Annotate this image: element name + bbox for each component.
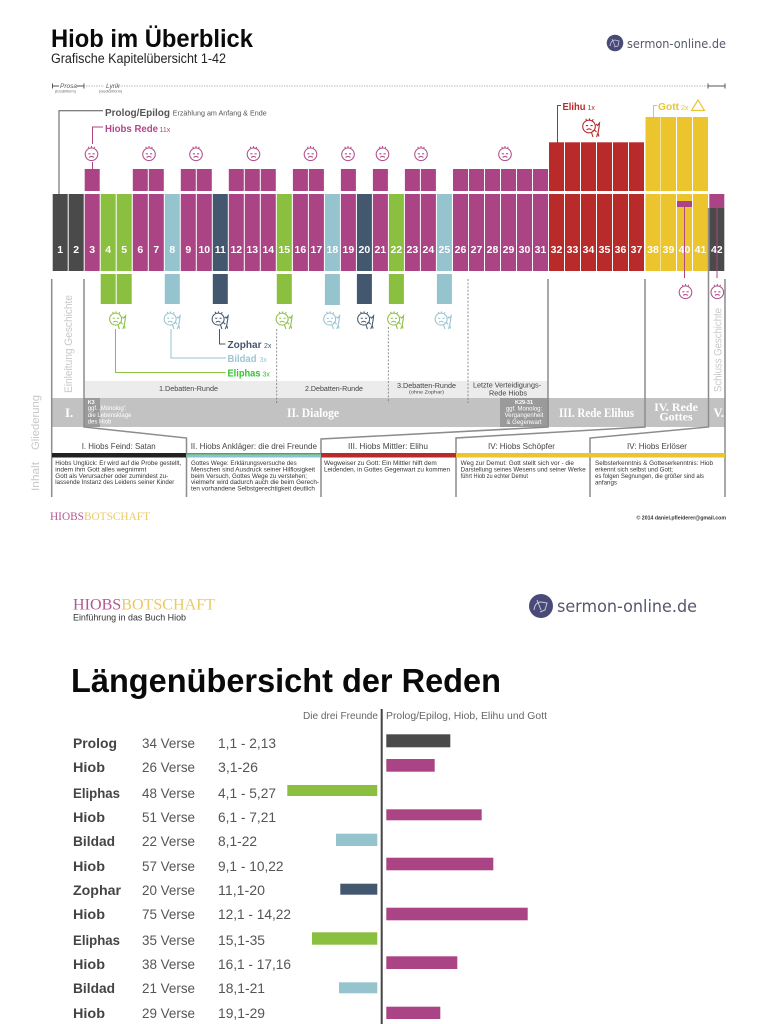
debate rounds band: 3.Debatten-Runde [397,383,456,390]
summary column I: Hiobs Unglück: Er wird auf die Probe gestellt, [55,461,182,467]
row: Hiob 3: Hiob [73,759,105,775]
chapter numbers: 28 [487,244,498,256]
row: Bildad 18: 18,1-21 [218,980,265,996]
prosa / lyrik timeline: (Gedichtform) [99,90,123,94]
label: Prolog/Epilog [59,107,267,194]
debate rounds band: Rede Hiobs [489,390,528,398]
outline band: sections I-V: III. Rede Elihus [559,406,634,420]
debate rounds band: 1.Debatten-Runde [159,386,218,393]
row: Eliphas 4-5 [73,785,377,801]
chapter numbers: 3 [89,244,95,256]
row: Hiob 19: 29 Verse [142,1005,195,1021]
chapter numbers: 18 [327,244,338,256]
row: Hiob 3 [73,759,435,775]
summary column IV: Weg zur Demut: Gott stellt sich vor - die [461,461,575,467]
row: Hiob 6-7 [73,809,482,825]
label: Elihu: 1x [588,105,595,112]
row: Bildad 18 [73,980,377,996]
brand second page: HIOBSBOTSCHAFT [73,596,215,614]
chapter numbers: 8 [169,244,175,256]
brand second page: Einführung in das Buch Hiob [73,612,186,624]
row: Prolog: 34 Verse [142,735,195,751]
summary column V [590,441,725,486]
summary column I: indem ihm Gott alles wegnimmt [55,468,147,474]
labels: friends: 3x [260,357,267,364]
summary column I: lassende Instanz des Leidens seiner Kinder [55,480,174,486]
outline band: sections I-V: Vergangenheit [505,413,544,419]
chapter numbers: 7 [153,244,159,256]
logo: sermon-online top [607,35,726,51]
icon: Elihu face [583,118,600,137]
chapter numbers: 21 [375,244,386,256]
summary column II: ten vorhandene Selbstgerechtigkeit deutlich [191,486,315,492]
row: Eliphas 4-5: 4,1 - 5,27 [218,785,276,801]
labels: friends: Zophar [228,339,262,351]
summary column II: vielmehr wird dadurch auch die beim Gerech- [191,480,319,486]
row: Eliphas 15: Eliphas [73,932,120,948]
outline band: sections I-V [52,398,725,427]
row: Hiob 12-14 [73,906,528,922]
chapter numbers: 9 [185,244,191,256]
chapter numbers: 12 [230,244,242,256]
prosa / lyrik timeline [52,83,725,94]
row: Hiob 9-10 [73,858,493,874]
vertical labels: Inhalt [30,462,42,491]
summary column I: Gott als Verursacher oder zumindest zu- [55,474,168,480]
chart legend: Die drei Freunde [303,711,378,722]
chapter numbers: 35 [599,244,610,256]
chapter numbers: 27 [471,244,482,256]
summary column I: I. Hiobs Feind: Satan [82,441,156,451]
row: Eliphas 4-5: Eliphas [73,785,120,801]
row: Bildad 8 [73,833,377,849]
row: Hiob 19: 19,1-29 [218,1005,265,1021]
labels: friends: Eliphas [228,368,261,380]
row: Zophar 11: Zophar [73,882,122,898]
row: Hiob 19: Hiob [73,1005,105,1021]
chapter numbers: 6 [137,244,143,256]
chapter numbers: 11 [215,244,226,256]
chart axis [381,709,383,1024]
summary column IV: Darstellung seines Wesens und seiner Werke [461,468,586,474]
brand second page [73,596,215,624]
row: Eliphas 4-5: 48 Verse [142,785,195,801]
summary column II: II. Hiobs Ankläger: die drei Freunde [191,441,317,451]
chapter numbers: 15 [278,244,290,256]
prosa / lyrik timeline: (Erzählform) [55,90,77,94]
label: Elihu: Elihu [562,101,586,113]
summary column II: Menschen sind Ausdruck seiner Hilflosigkeit [191,468,315,474]
logo: sermon-online top: sermon-online.de [627,36,726,51]
icons: friends [110,311,451,329]
copyright: © 2014 daniel.pfleiderer@gmail.com [636,514,726,522]
label: Hiobs Rede [92,123,171,169]
row: Hiob 6-7: 51 Verse [142,809,195,825]
chapter numbers: 2 [73,244,79,256]
outline band: sections I-V: & Gegenwart [506,420,542,426]
label: Prolog/Epilog: Prolog/Epilog [105,107,170,119]
row: Zophar 11: 11,1-20 [218,882,265,898]
debate rounds band: 2.Debatten-Runde [305,386,363,393]
summary column V: Selbsterkenntnis & Gotteserkenntnis: Hiob [595,461,714,467]
chapter numbers: 17 [311,244,322,256]
outline band: sections I-V: V. [714,406,724,420]
row: Prolog: 1,1 - 2,13 [218,735,276,751]
label: Prolog/Epilog: Erzählung am Anfang & Ende [173,110,267,118]
vertical labels: Einleitung Geschichte [63,295,75,393]
chapter numbers: 38 [647,244,659,256]
summary column V: anfangs [595,480,617,486]
summary column IV: IV: Hiobs Schöpfer [488,441,555,451]
chapter numbers: 14 [262,244,274,256]
row: Hiob 16-17: Hiob [73,956,105,972]
row: Hiob 16-17: 16,1 - 17,16 [218,956,291,972]
labels: friends: 3x [262,372,270,378]
chapter columns 1-42 [53,194,724,271]
row: Bildad 8: 22 Verse [142,833,195,849]
chapter numbers: 4 [105,244,111,256]
row: Prolog [73,734,450,751]
row: Hiob 6-7: Hiob [73,809,105,825]
outline band: sections I-V: K29-31 [515,400,533,406]
chart legend: Prolog/Epilog, Hiob, Elihu und Gott [386,711,547,722]
row: Bildad 18: Bildad [73,980,115,996]
chapter numbers: 19 [343,244,354,256]
label: Gott [654,100,704,117]
chapter numbers: 24 [423,244,434,256]
chapter numbers: 25 [439,244,450,256]
outline band: sections I-V: Gottes [659,410,693,424]
debate rounds band: (ohne Zophar) [409,390,445,394]
row: Hiob 3: 26 Verse [142,759,195,775]
chapter numbers: 31 [535,244,546,256]
summary column V: IV: Hiobs Erlöser [627,441,687,451]
structure lines [52,204,725,497]
row: Hiob 3: 3,1-26 [218,759,258,775]
chapter numbers: 1 [57,244,63,256]
chapter numbers: 23 [407,244,418,256]
row: Hiob 6-7: 6,1 - 7,21 [218,809,276,825]
label: Gott: 2x [681,105,689,112]
chapter numbers: 33 [567,244,578,256]
chapter numbers: 42 [711,244,723,256]
upper blocks: Hiob speeches [85,169,548,191]
chapter numbers [57,244,723,256]
row: Hiob 9-10: 9,1 - 10,22 [218,858,284,874]
labels: friends: Bildad [228,353,256,365]
faces: Hiob row [85,146,511,161]
outline band: sections I-V: I. [65,405,73,420]
chapter numbers: 34 [583,244,594,256]
subtitle: Grafische Kapitelübersicht 1-42 [51,51,226,66]
summary column IV [456,441,590,480]
chapter numbers: 29 [503,244,514,256]
summary column III: III. Hiobs Mittler: Elihu [348,441,428,451]
chapter numbers: 41 [695,244,706,256]
chapter numbers: 30 [519,244,530,256]
row: Zophar 11: 20 Verse [142,882,195,898]
outline band: sections I-V: K3 [88,400,95,406]
row: Hiob 9-10: Hiob [73,858,105,874]
summary column III: Leidenden, in Gottes Gegenwart zu kommen [324,468,450,474]
row: Hiob 16-17: 38 Verse [142,956,195,972]
chapter numbers: 26 [455,244,466,256]
chapter numbers: 36 [615,244,626,256]
row: Hiob 12-14: Hiob [73,906,105,922]
chapter numbers: 10 [198,244,210,256]
vertical labels: Gliederung [30,395,42,450]
row: Hiob 16-17 [73,956,457,972]
upper blocks: Elihu [549,142,644,191]
prosa / lyrik timeline: Lyrik [106,83,120,90]
outline band: sections I-V: II. Dialoge [287,406,339,420]
row: Eliphas 15 [73,932,377,948]
heading: Längenübersicht: Längenübersicht der Reden [71,662,501,699]
summary column II [186,441,321,492]
logo: sermon-online second page [529,594,697,618]
label: Hiobs Rede: 11x [160,127,171,134]
row: Eliphas 15: 15,1-35 [218,932,265,948]
labels: friends: 2x [264,343,272,350]
lower blocks: friends' speeches [101,274,452,305]
debate rounds band: Letzte Verteidigungs- [473,382,542,390]
vertical labels: Schluss Geschichte [712,308,724,392]
row: Hiob 12-14: 75 Verse [142,906,195,922]
chapter numbers: 32 [551,244,562,256]
summary column I [52,441,186,486]
outline band: sections I-V: des Hiob [88,420,112,426]
row: Zophar 11 [73,882,377,898]
upper blocks: Gott [646,117,708,191]
vertical labels [30,295,724,491]
chapter numbers: 40 [679,244,690,256]
outline band: sections I-V: IV. Rede [654,400,699,414]
chapter numbers: 5 [121,244,127,256]
label: Hiobs Rede: Hiobs Rede [105,123,158,135]
footer brand top: HIOBSBOTSCHAFT [50,511,150,523]
summary column IV: führt Hiob zu echter Demut [461,474,528,480]
labels: friends [116,329,272,380]
debate rounds band [85,381,548,398]
row: Bildad 18: 21 Verse [142,980,195,996]
row: Hiob 12-14: 12,1 - 14,22 [218,906,291,922]
summary column III [321,441,456,474]
chapter numbers: 22 [391,244,402,256]
row: Prolog: Prolog [73,735,117,751]
faces: chapters 40 and 42 [679,284,724,299]
row: Hiob 9-10: 57 Verse [142,858,195,874]
label: Elihu [558,101,595,142]
outline band: sections I-V: ggf. Monolog: [506,406,543,412]
title: Hiob im Überblick [51,24,253,53]
chapter numbers: 20 [359,244,370,256]
summary column II: beim Versuch, Gottes Wege zu verstehen; [191,474,307,480]
chapter numbers: 16 [295,244,306,256]
summary column III: Wegweiser zu Gott: Ein Mittler hilft dem [324,461,437,467]
chart legend [303,711,547,722]
row: Hiob 19 [73,1005,440,1021]
summary column V: es folgen Segnungen, die größer sind als [595,474,704,480]
outline band: sections I-V: die Lebensklage [88,413,132,419]
label: Gott: Gott [658,101,679,113]
chapter numbers: 13 [246,244,258,256]
summary column II: Gottes Wege: Erklärungsversuche des [191,461,297,467]
row: Eliphas 15: 35 Verse [142,932,195,948]
logo: sermon-online second page: sermon-online.de [557,597,697,617]
chapter numbers: 39 [663,244,674,256]
prosa / lyrik timeline: Prosa [60,83,77,90]
summary column V: erkennt sich selbst und Gott; [595,468,673,474]
outline band: sections I-V: ggf. ‚Monolog': [88,406,127,412]
chapter numbers: 37 [631,244,642,256]
row: Bildad 8: 8,1-22 [218,833,257,849]
row: Bildad 8: Bildad [73,833,115,849]
